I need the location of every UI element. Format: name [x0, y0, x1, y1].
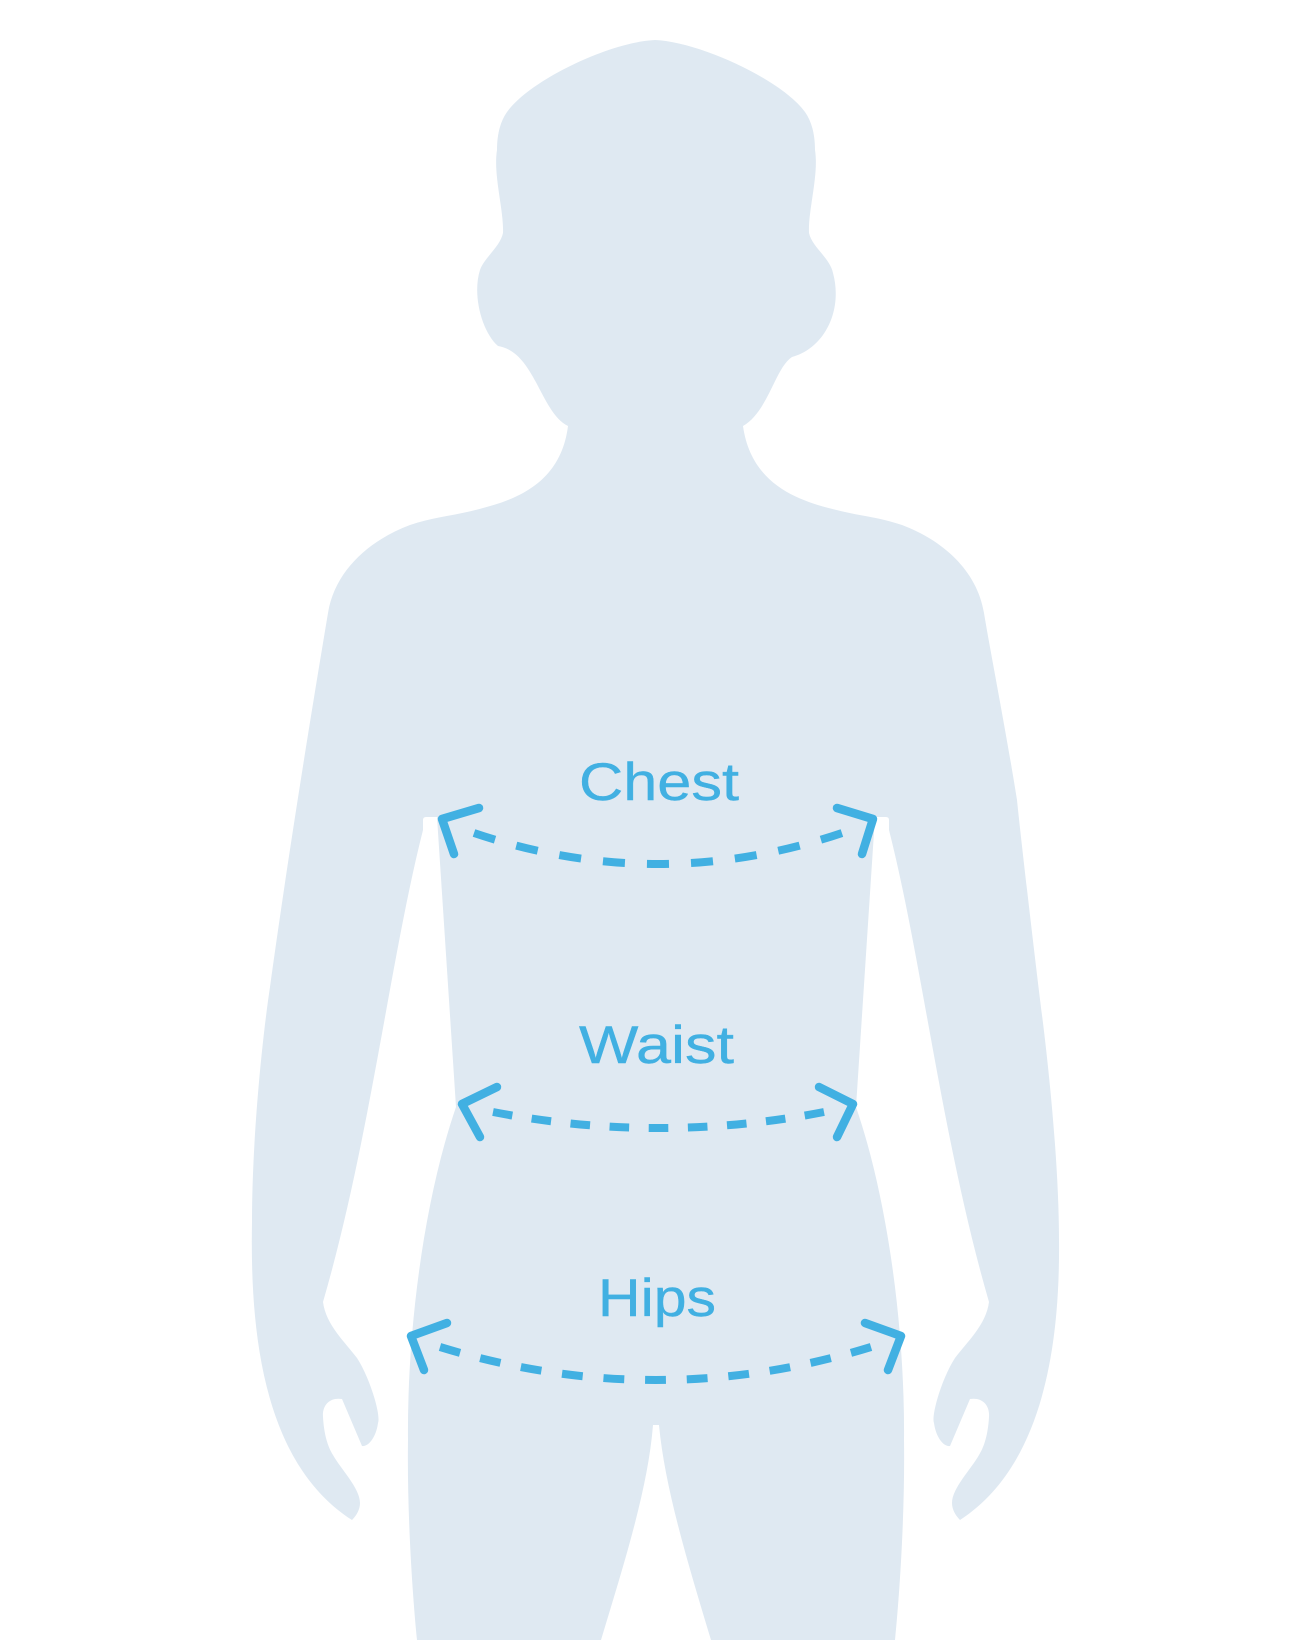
waist left arrowhead — [462, 1087, 497, 1137]
chest measurement — [442, 753, 873, 864]
waist measurement — [462, 1016, 853, 1137]
hips label: Hips — [598, 1269, 716, 1328]
chest right arrowhead — [837, 808, 873, 854]
chest dashed curve — [474, 833, 842, 864]
body silhouette — [252, 40, 1059, 1640]
hips right arrowhead — [865, 1323, 901, 1370]
chest label: Chest — [579, 753, 739, 812]
chest left arrowhead — [442, 808, 479, 854]
hips dashed curve — [440, 1347, 871, 1380]
hips left arrowhead — [411, 1323, 447, 1370]
hips measurement — [411, 1269, 901, 1380]
waist dashed curve — [493, 1112, 824, 1128]
waist right arrowhead — [819, 1087, 853, 1137]
waist label: Waist — [579, 1016, 734, 1075]
